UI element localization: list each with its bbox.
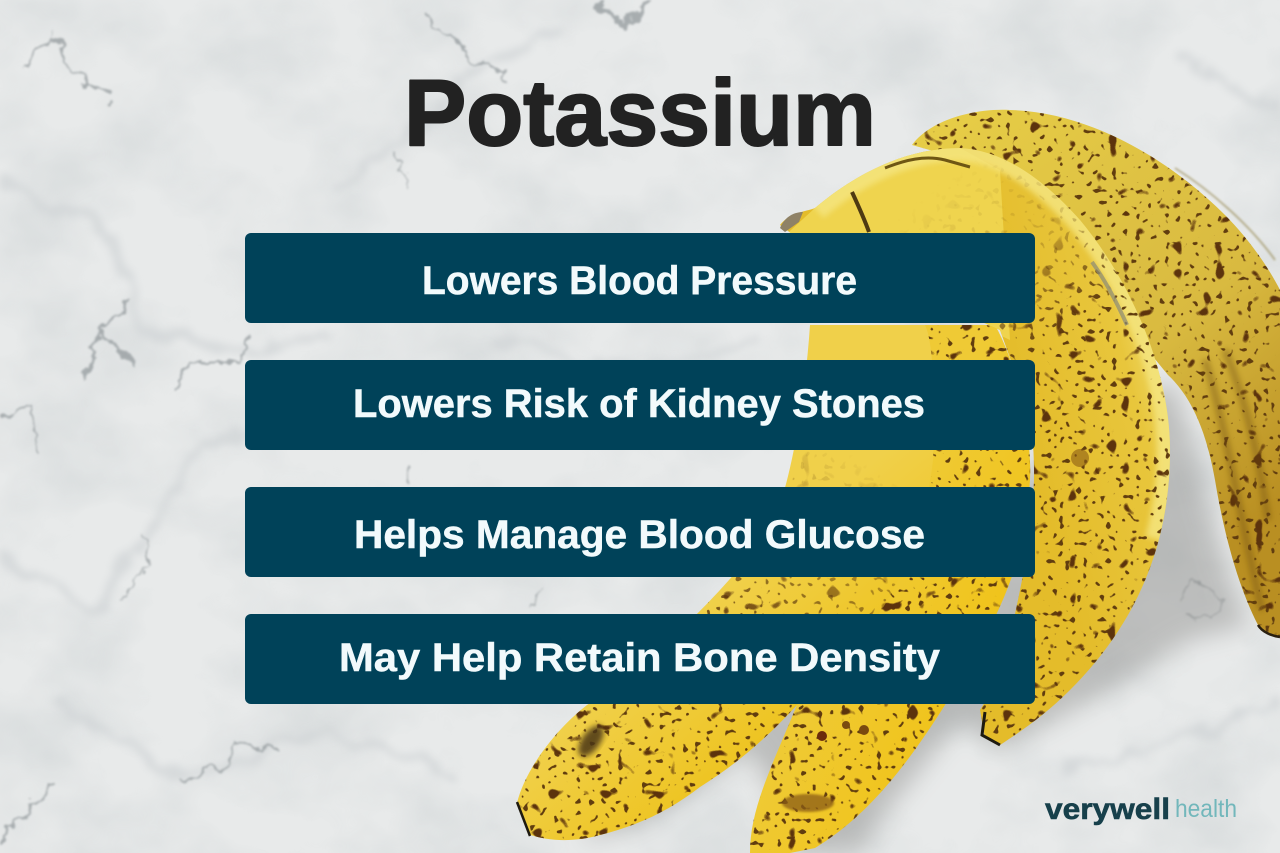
bar: may help retain bone density [245, 614, 1035, 704]
bar: helps manage blood glucose: Helps Manage Blood Glucose [354, 513, 925, 557]
logo: verywell health: health [1175, 795, 1237, 823]
logo: verywell health: verywell [1045, 793, 1170, 826]
bar: lowers blood pressure: Lowers Blood Pressure [422, 259, 857, 303]
left banana [517, 325, 934, 840]
bar: lowers risk of kidney stones: Lowers Risk of Kidney Stones [353, 382, 925, 426]
third banana [750, 325, 1030, 853]
bananas [517, 110, 1280, 853]
logo: verywell health [1045, 793, 1237, 826]
title: Potassium [404, 60, 876, 165]
bar: lowers risk of kidney stones [245, 360, 1035, 450]
back banana [912, 110, 1280, 637]
big front banana [780, 148, 1170, 745]
bar: may help retain bone density: May Help Retain Bone Density [339, 636, 941, 680]
banana shadows [580, 380, 1250, 853]
bar: lowers blood pressure [245, 233, 1035, 323]
bar: helps manage blood glucose [245, 487, 1035, 577]
